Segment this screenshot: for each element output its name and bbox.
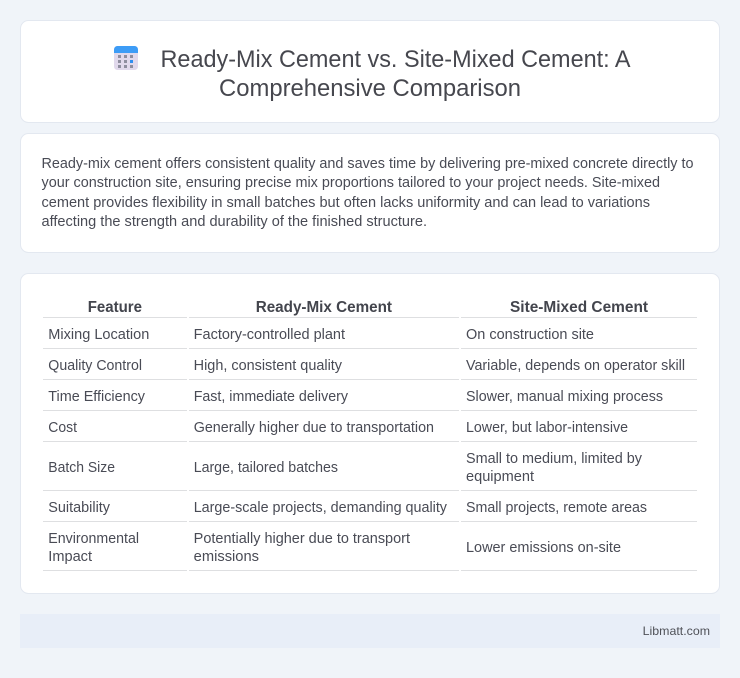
intro text: your construction site, ensuring precise mix proportions tailored to your project needs. Site-mixed <box>42 175 660 191</box>
intro text: cement provides flexibility in small batches but often lacks uniformity and can lead to variations <box>42 195 650 211</box>
title <box>160 46 630 102</box>
row: cost: Cost <box>48 420 77 436</box>
row: suitability: Large-scale projects, demanding quality <box>194 500 448 516</box>
row: quality control <box>48 358 685 374</box>
row: cost: Generally higher due to transportation <box>194 420 434 436</box>
row: cost <box>48 420 628 436</box>
row: environmental impact <box>48 531 621 565</box>
intro text <box>42 156 694 230</box>
intro text: affecting the strength and durability of the finished structure. <box>42 214 427 230</box>
row: time efficiency: Time Efficiency <box>48 389 146 405</box>
row: batch size <box>48 451 643 485</box>
row: cost: Lower, but labor-intensive <box>466 420 628 436</box>
row: batch size: Small to medium, limited by <box>466 451 643 467</box>
row: mixing location: Mixing Location <box>48 327 149 343</box>
panel: comparison table <box>20 274 720 594</box>
panel: title card <box>20 20 720 122</box>
row: batch size: Batch Size <box>48 460 115 476</box>
row: mixing location: On construction site <box>466 327 594 343</box>
row: quality control: Quality Control <box>48 358 142 374</box>
row: quality control: Variable, depends on operator skill <box>466 358 685 374</box>
row: batch size: equipment <box>466 469 534 485</box>
row: time efficiency <box>48 389 663 405</box>
table header row: Feature <box>88 299 142 316</box>
table header row: Ready-Mix Cement <box>256 299 393 316</box>
title: Comprehensive Comparison <box>219 75 521 102</box>
intro text: Ready-mix cement offers consistent quality and saves time by delivering pre-mixed concrete directly to <box>42 156 694 172</box>
footer: Libmatt.com <box>643 624 710 638</box>
row: environmental impact: Lower emissions on-site <box>466 540 621 556</box>
row: time efficiency: Slower, manual mixing process <box>466 389 663 405</box>
title: Ready-Mix Cement vs. Site-Mixed Cement: A <box>160 46 630 73</box>
table header row: Site-Mixed Cement <box>510 299 649 316</box>
row: environmental impact: Environmental <box>48 531 139 547</box>
row: environmental impact: emissions <box>194 549 259 565</box>
row: environmental impact: Potentially higher due to transport <box>194 531 410 547</box>
icon: calendar <box>114 46 138 70</box>
row: mixing location <box>48 327 594 343</box>
row: mixing location: Factory-controlled plant <box>194 327 345 343</box>
row: suitability: Small projects, remote areas <box>466 500 647 516</box>
table header row <box>88 299 649 316</box>
row: quality control: High, consistent quality <box>194 358 343 374</box>
row: batch size: Large, tailored batches <box>194 460 338 476</box>
row: time efficiency: Fast, immediate delivery <box>194 389 349 405</box>
row: environmental impact: Impact <box>48 549 92 565</box>
footer <box>20 614 720 648</box>
panel: introduction <box>20 134 720 252</box>
row: suitability: Suitability <box>48 500 111 516</box>
row: suitability <box>48 500 647 516</box>
